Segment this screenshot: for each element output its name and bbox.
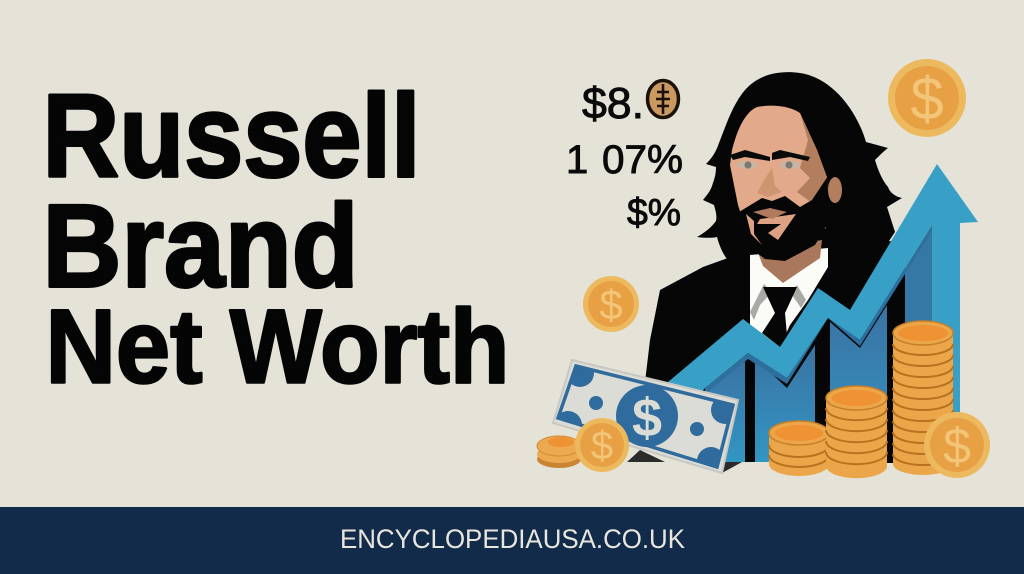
icon: front coin: $ bbox=[591, 424, 613, 468]
beard bbox=[739, 176, 828, 261]
icon: small figure coin bbox=[648, 80, 678, 118]
figures text: $% bbox=[627, 192, 681, 234]
footer bar bbox=[0, 507, 1024, 574]
tie bbox=[762, 287, 797, 347]
icon: top coin bbox=[888, 59, 966, 137]
arrow shadow bbox=[705, 225, 932, 394]
title: Russell bbox=[42, 70, 420, 202]
icon: right coin bbox=[924, 412, 990, 478]
icon: left coin: $ bbox=[599, 281, 623, 328]
figures text: $8. bbox=[582, 79, 644, 128]
arrow bbox=[668, 164, 978, 412]
title: Brand bbox=[42, 180, 358, 312]
brows bbox=[730, 150, 810, 161]
mouth bbox=[753, 208, 787, 219]
figures text: 1 bbox=[566, 138, 588, 182]
icon: banknote bbox=[553, 359, 742, 475]
figures text bbox=[566, 79, 683, 234]
footer text: ENCYCLOPEDIAUSA.CO.UK bbox=[340, 524, 685, 554]
title bbox=[42, 70, 510, 406]
person bbox=[645, 72, 905, 400]
chart bars bbox=[705, 226, 932, 463]
icon: top coin: $ bbox=[910, 65, 944, 132]
chin skin bbox=[746, 214, 796, 245]
coin stack: short bbox=[769, 421, 829, 476]
icon: left coin bbox=[583, 276, 639, 332]
nose bbox=[757, 168, 782, 197]
hair bbox=[697, 72, 902, 312]
icon: banknote: $ bbox=[632, 388, 662, 448]
figures text: 07% bbox=[602, 138, 683, 182]
eyes bbox=[737, 161, 800, 169]
collar shadow bbox=[750, 284, 806, 320]
suit bbox=[645, 240, 905, 400]
title: Net Worth bbox=[46, 288, 510, 406]
ear bbox=[828, 177, 842, 203]
note shadow bbox=[627, 450, 742, 473]
icon: front coin bbox=[575, 418, 629, 472]
icon: right coin: $ bbox=[943, 418, 971, 474]
coin stack: tall bbox=[893, 321, 953, 475]
shirt bbox=[750, 248, 828, 347]
face shadow bbox=[797, 113, 828, 215]
neck bbox=[757, 240, 822, 283]
icon: small coin pile bbox=[537, 436, 581, 468]
coin stack: medium bbox=[826, 386, 887, 478]
face bbox=[730, 106, 828, 258]
